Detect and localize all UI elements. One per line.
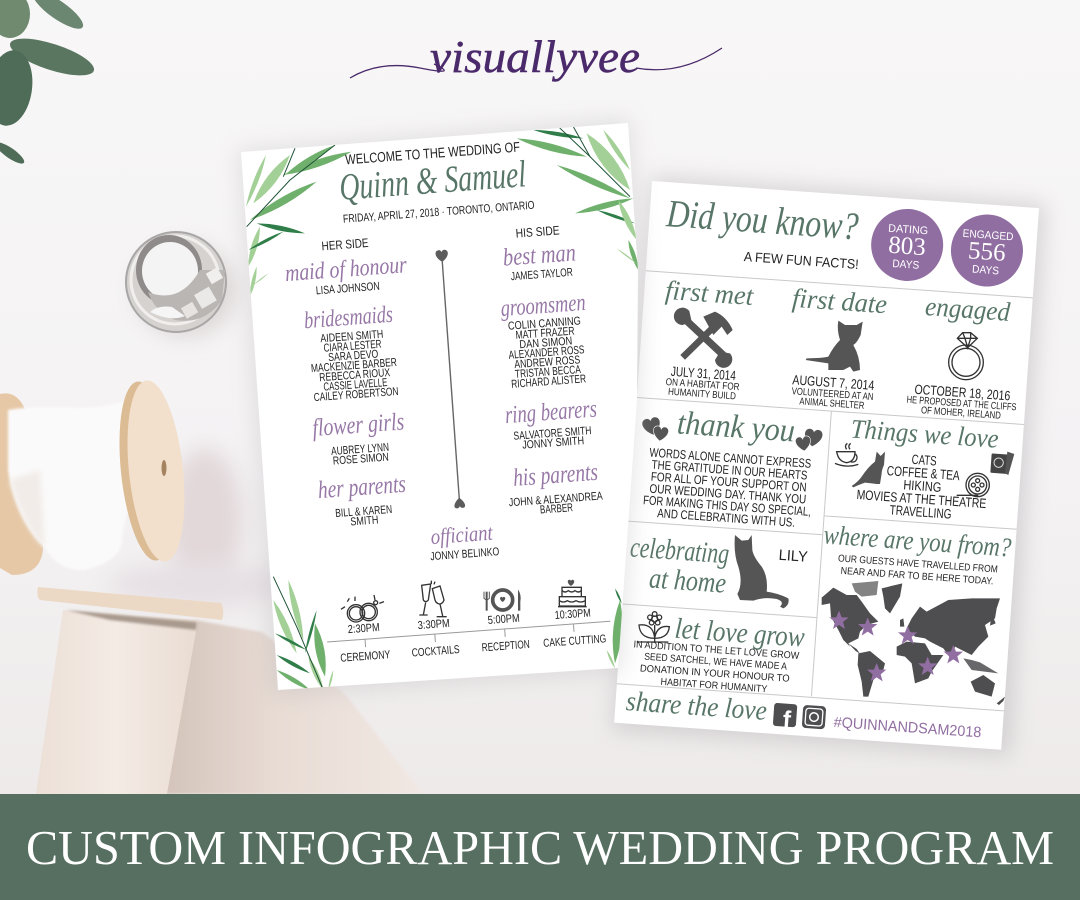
date: october 18, 2016: HE PROPOSED AT THE CLIFFS xyxy=(906,395,1017,413)
header: welcome xyxy=(337,138,535,226)
role: flower girls xyxy=(311,408,407,469)
role: groomsmen: ALEXANDER ROSS xyxy=(508,344,585,362)
icon: flower xyxy=(637,612,669,642)
photo: eucalyptus leaves xyxy=(0,0,98,167)
panel: share the love xyxy=(625,686,982,741)
photo: wooden spool with cotton xyxy=(0,378,192,575)
role: flower girls: AUBREY LYNN xyxy=(331,442,389,458)
aisle line with hearts xyxy=(435,250,466,509)
role: bridesmaids: bridesmaids xyxy=(303,302,394,334)
icon: instagram xyxy=(802,705,826,729)
text: thank you message: AND CELEBRATING WITH US. xyxy=(657,506,795,530)
role: his parents xyxy=(506,459,604,519)
date: august 7, 2014: AUGUST 7, 2014 xyxy=(792,372,875,393)
role: her parents: BILL & KAREN xyxy=(335,504,393,520)
panel: things we love xyxy=(835,414,1014,524)
role: ring bearers xyxy=(504,395,599,453)
date: october 18, 2016 xyxy=(906,381,1018,423)
badge: engaged 556 days: 556 xyxy=(967,237,1007,267)
event: cocktails: COCKTAILS xyxy=(411,644,460,660)
role: groomsmen: TRISTAN BECCA xyxy=(515,364,582,381)
icon: facebook xyxy=(772,703,797,734)
role: bridesmaids: AIDEEN SMITH xyxy=(320,329,384,345)
text: guests travelled xyxy=(837,553,998,588)
date: july 31, 2014 xyxy=(665,363,741,403)
heading: first date: first date xyxy=(791,283,888,319)
badge: dating 803 days xyxy=(869,207,946,283)
role: groomsmen: RICHARD ALISTER xyxy=(511,373,587,391)
logo: visuallyvee xyxy=(350,31,722,82)
event: cake cutting xyxy=(543,580,607,650)
event: cocktails xyxy=(411,581,460,660)
icon: wedding cake xyxy=(558,580,587,607)
list: things we love: MOVIES AT THE THEATRE xyxy=(856,487,987,511)
icon: cat lily xyxy=(735,535,789,608)
badge: engaged 556 days xyxy=(949,212,1025,289)
label: her side: HER SIDE xyxy=(321,236,369,253)
role: ring bearers: ring bearers xyxy=(504,395,598,429)
leaves: bottom right corner xyxy=(606,588,622,668)
role: bridesmaids: REBECCA RIOUX xyxy=(319,367,391,384)
leaves: top left corner xyxy=(244,143,353,297)
right sheet: did you know fun facts xyxy=(612,176,1046,756)
text: let love grow message: IN ADDITION TO THE LET LOVE GROW xyxy=(633,639,800,662)
leaves: top right corner xyxy=(516,127,640,271)
panel: first date xyxy=(791,283,888,412)
heading: thank you: thank you xyxy=(676,405,796,450)
role: flower girls: flower girls xyxy=(311,408,405,442)
list: things we love: HIKING xyxy=(903,477,942,495)
role: her parents xyxy=(317,471,409,531)
timeline axis xyxy=(327,621,611,650)
date: july 31, 2014: ON A HABITAT FOR xyxy=(665,377,740,393)
date: july 31, 2014: HUMANITY BUILD xyxy=(668,387,736,402)
panel dividers xyxy=(617,271,1033,711)
event: ceremony xyxy=(340,595,391,665)
date: july 31, 2014: JULY 31, 2014 xyxy=(670,364,737,383)
subheading: a few fun facts: A FEW FUN FACTS! xyxy=(743,249,859,272)
panel: celebrating at home xyxy=(627,531,808,608)
text: date and place: FRIDAY, APRIL 27, 2018 · TORONTO, ONTARIO xyxy=(343,200,535,226)
label: his side: HIS SIDE xyxy=(515,223,560,241)
heading: engaged: engaged xyxy=(924,291,1012,327)
role: bridesmaids: CIARA LESTER xyxy=(323,339,382,355)
map stars xyxy=(829,611,963,681)
icon: wedding rings xyxy=(341,595,384,622)
icon: cat xyxy=(852,452,885,487)
event: ceremony: 2:30PM xyxy=(347,622,380,636)
watercolor leaves xyxy=(244,127,640,692)
event: cake cutting: 10:30PM xyxy=(554,607,591,622)
date: august 7, 2014: VOLUNTEERED AT AN xyxy=(791,386,874,403)
text: let love grow message xyxy=(631,639,800,697)
panel: let love grow xyxy=(631,612,806,697)
icon: facebook: f xyxy=(782,706,793,734)
text: let love grow message: DONATION IN YOUR HONOUR TO xyxy=(640,663,790,685)
role: best man: JAMES TAYLOR xyxy=(510,267,573,283)
heading: first met: first met xyxy=(664,275,756,311)
icon: diamond ring xyxy=(949,333,983,380)
left sheet: wedding program xyxy=(238,118,642,696)
badge: engaged 556 days: ENGAGED xyxy=(962,228,1014,243)
heading: celebrating at home: celebrating xyxy=(629,531,730,570)
heading: celebrating at home xyxy=(627,531,730,600)
role: groomsmen: ANDREW ROSS xyxy=(514,354,581,371)
banner title: CUSTOM INFOGRAPHIC WEDDING PROGRAM xyxy=(26,820,1054,875)
sheet background xyxy=(241,123,638,690)
event: reception xyxy=(481,589,530,654)
icon: pair of hearts right xyxy=(795,428,823,452)
panel: thank you xyxy=(641,405,823,531)
list: things we love: TRAVELLING xyxy=(889,502,952,522)
photo: second spool with ribbon xyxy=(36,587,223,794)
label: lily: LILY xyxy=(778,547,808,566)
role: groomsmen xyxy=(500,290,592,391)
column: his side xyxy=(489,222,604,519)
panel: did you know header xyxy=(664,192,1025,289)
text: thank you message: THE GRATITUDE IN OUR HEARTS xyxy=(651,458,808,483)
heading: did you know: Did you know? xyxy=(664,192,860,248)
text: thank you message: OUR WEDDING DAY. THANK YOU xyxy=(649,482,807,507)
role: bridesmaids: CASSIE LAVELLE xyxy=(323,377,388,394)
role: bridesmaids xyxy=(303,302,399,404)
panel: first met xyxy=(664,275,756,403)
world map xyxy=(822,581,1005,705)
sheet background xyxy=(614,181,1039,750)
date: october 18, 2016: OCTOBER 18, 2016 xyxy=(914,382,1011,403)
role: maid of honour: maid of honour xyxy=(284,252,408,287)
text: thank you message xyxy=(642,445,815,531)
photo: soft shadows and ribbon fold xyxy=(110,448,423,794)
list: things we love: CATS xyxy=(911,452,937,469)
badge: dating 803 days: DATING xyxy=(888,223,929,237)
text: thank you message: WORDS ALONE CANNOT EXPRESS xyxy=(649,446,812,471)
role: his parents: JOHN & ALEXANDREA xyxy=(509,490,603,509)
role: groomsmen: COLIN CANNING xyxy=(508,315,581,333)
role: groomsmen: groomsmen xyxy=(500,290,586,322)
icon: coffee cup xyxy=(835,443,858,466)
hashtag: #QUINNANDSAM2018 xyxy=(833,714,982,741)
heading: share the love: share the love xyxy=(625,686,768,727)
role: officiant xyxy=(428,519,500,563)
role: best man xyxy=(502,239,578,284)
panel: engaged xyxy=(906,291,1018,423)
date: august 7, 2014: ANIMAL SHELTER xyxy=(799,396,865,412)
icon: crossed hammer and wrench xyxy=(674,308,733,368)
event: ceremony: CEREMONY xyxy=(340,649,391,665)
date: october 18, 2016: OF MOHER, IRELAND xyxy=(921,405,1001,422)
badge: engaged 556 days: DAYS xyxy=(972,264,999,277)
photo: wedding rings xyxy=(126,232,236,336)
icon: kitten xyxy=(806,321,863,372)
role: maid of honour: LISA JOHNSON xyxy=(315,281,380,297)
heading: things we love: Things we love xyxy=(850,414,1000,454)
role: bridesmaids: MACKENZIE BARBER xyxy=(311,357,397,375)
role: groomsmen: MATT FRAZER xyxy=(515,326,575,342)
icon: pair of hearts left xyxy=(641,416,669,442)
event: reception: RECEPTION xyxy=(481,639,530,654)
list: things we love: COFFEE & TEA xyxy=(886,463,960,483)
text: thank you message: FOR ALL OF YOUR SUPPORT ON xyxy=(650,470,807,495)
role: bridesmaids: CAILEY ROBERTSON xyxy=(313,386,399,404)
role: officiant: officiant xyxy=(430,520,494,549)
text: let love grow message: SEED SATCHEL, WE HAVE MADE A xyxy=(644,652,788,673)
timeline xyxy=(327,580,611,665)
role: maid of honour xyxy=(284,252,409,300)
leaves: bottom left corner xyxy=(270,577,334,692)
event: cake cutting: CAKE CUTTING xyxy=(543,633,607,650)
heading: celebrating at home: at home xyxy=(648,562,727,600)
heading: where are you from: where are you from? xyxy=(823,519,1013,563)
event: cocktails: 3:30PM xyxy=(417,618,450,632)
role: ring bearers: JONNY SMITH xyxy=(522,435,585,452)
role: her parents: her parents xyxy=(317,471,407,504)
list: things we love xyxy=(855,448,990,524)
heading: let love grow: let love grow xyxy=(674,613,806,654)
role: best man: best man xyxy=(502,239,577,272)
text: let love grow message: HABITAT FOR HUMANITY xyxy=(660,677,768,695)
role: his parents: BARBER xyxy=(540,502,573,517)
panel: where are you from xyxy=(822,519,1013,705)
logo: visuallyvee: visuallyvee xyxy=(430,31,640,82)
role: officiant: JONNY BELINKO xyxy=(430,546,500,563)
event: reception: 5:00PM xyxy=(487,613,520,627)
banner xyxy=(0,794,1080,900)
text: welcome line: WELCOME TO THE WEDDING OF xyxy=(345,139,520,167)
badge: dating 803 days: 803 xyxy=(887,232,927,261)
icon: film reel xyxy=(957,473,989,497)
icon: passport and tickets xyxy=(990,452,1014,475)
role: groomsmen: DAN SIMON xyxy=(519,335,573,351)
names: quinn and samuel: Quinn & Samuel xyxy=(338,153,527,209)
role: her parents: SMITH xyxy=(350,514,379,528)
icon: champagne flutes xyxy=(419,581,447,617)
role: ring bearers: SALVATORE SMITH xyxy=(513,425,592,443)
text: thank you message: FOR MAKING THIS DAY SO SPECIAL, xyxy=(643,493,811,519)
role: his parents: his parents xyxy=(512,459,599,492)
column: her side xyxy=(283,233,426,532)
role: bridesmaids: SARA DEVO xyxy=(328,349,379,364)
icon: plate and cutlery xyxy=(484,589,521,611)
date: august 7, 2014 xyxy=(791,372,875,412)
badge: dating 803 days: DAYS xyxy=(892,258,920,272)
text: guests travelled: NEAR AND FAR TO BE HERE TODAY. xyxy=(840,566,994,587)
text: guests travelled: OUR GUESTS HAVE TRAVELLED FROM xyxy=(838,553,998,576)
role: flower girls: ROSE SIMON xyxy=(332,452,389,468)
